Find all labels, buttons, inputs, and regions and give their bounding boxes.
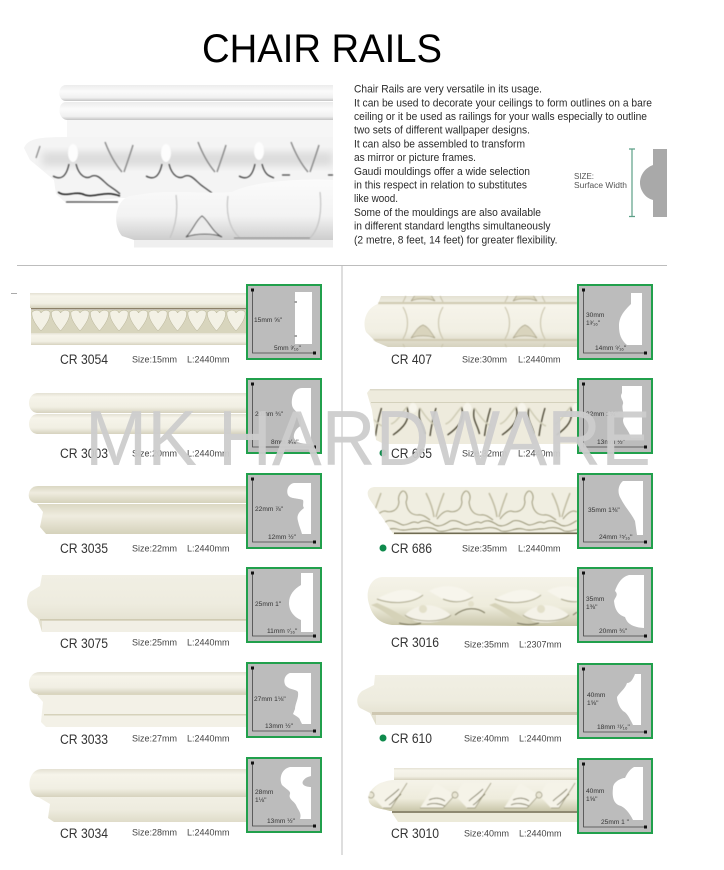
product: CR 407 xyxy=(364,296,577,367)
product: CR 3016: Size:35mm xyxy=(464,640,509,650)
neck strip xyxy=(67,119,333,143)
product: CR 407: Size:30mm xyxy=(462,354,507,364)
profile box: CR 665: 32mm 1¼" xyxy=(586,411,618,418)
intro paragraph: Gaudi mouldings offer a wide selection xyxy=(354,166,530,178)
profile box: CR 665: 13mm ½" xyxy=(597,438,626,446)
profile box: CR 3033 xyxy=(247,663,321,737)
profile box: CR 3034 xyxy=(247,758,321,832)
intro paragraph: (2 metre, 8 feet, 14 feet) for greater flexibility. xyxy=(354,234,558,246)
product: CR 3003 xyxy=(29,393,246,461)
product: CR 3010: Size:40mm xyxy=(464,828,509,838)
product: CR 3016: L:2307mm xyxy=(519,640,562,650)
product: CR 3033: CR 3033 xyxy=(60,732,108,747)
watermark: MK HARDWARE xyxy=(85,394,651,482)
profile box: CR 686: 24mm ¹⁵⁄₁₆" xyxy=(599,534,633,541)
intro paragraph: It can also be assembled to transform xyxy=(354,138,525,150)
intro paragraph: Chair Rails are very versatile in its usage. xyxy=(354,84,542,96)
product: CR 3075: Size:25mm xyxy=(132,638,177,648)
product: CR 3016 xyxy=(368,577,577,650)
profile box: CR 686 xyxy=(578,474,652,548)
lower block arcs and tent xyxy=(170,192,321,238)
profile box: CR 3016: 20mm ¾" xyxy=(599,628,628,635)
profile box: CR 3054: 15mm ⅝" xyxy=(254,317,283,324)
title: CHAIR RAILS xyxy=(202,27,442,71)
profile box: CR 3034: 13mm ½" xyxy=(267,817,296,825)
product: CR 686: Size:35mm xyxy=(462,544,507,554)
product: CR 610: L:2440mm xyxy=(519,734,562,744)
hero moulding image xyxy=(24,85,333,248)
intro paragraph: like wood. xyxy=(354,193,398,205)
profile box: CR 3034: 28mm xyxy=(255,789,274,796)
profile box: CR 3016: 1⅜" xyxy=(586,604,598,611)
size legend diagram: Surface Width xyxy=(574,181,627,190)
green dot marker xyxy=(380,734,386,742)
intro paragraph: two sets of different wallpaper designs. xyxy=(354,125,530,137)
profile box: CR 3010: 40mm xyxy=(586,788,605,795)
profile box: CR 3016 xyxy=(578,568,652,642)
profile box: CR 3033: 13mm ½" xyxy=(265,722,294,730)
product: CR 3010 xyxy=(368,768,577,841)
product: CR 407: CR 407 xyxy=(391,352,432,367)
intro paragraph: in different standard lengths simultaneously xyxy=(354,221,551,233)
profile box: CR 407: 14mm ⁹⁄₁₆" xyxy=(595,345,627,352)
lower bulged block xyxy=(116,180,333,240)
profile box: CR 3054 xyxy=(247,285,321,359)
product: CR 3035: L:2440mm xyxy=(187,544,230,554)
product: CR 665 xyxy=(367,389,577,461)
profile box: CR 3035: 12mm ½" xyxy=(268,533,297,541)
product: CR 3054 xyxy=(30,293,246,367)
product: CR 407: L:2440mm xyxy=(518,354,561,364)
product: CR 3034: CR 3034 xyxy=(60,826,108,841)
profile box: CR 3016: 35mm xyxy=(586,596,605,603)
product: CR 3034 xyxy=(29,769,246,841)
product: CR 3010: CR 3010 xyxy=(391,826,439,841)
profile box: CR 3010: 1⅝" xyxy=(586,796,598,803)
profile box: CR 665 xyxy=(578,379,652,453)
product: CR 686: L:2440mm xyxy=(518,544,561,554)
profile box: CR 3054: 5mm ³⁄₁₆" xyxy=(274,345,302,352)
product: CR 3054: Size:15mm xyxy=(132,354,177,364)
product: CR 3003: Size:20mm xyxy=(132,448,177,458)
product: CR 3034: Size:28mm xyxy=(132,828,177,838)
product: CR 3075: L:2440mm xyxy=(187,638,230,648)
product: CR 610: Size:40mm xyxy=(464,734,509,744)
intro paragraph: ceiling or it be used as railings for your walls especially to outline xyxy=(354,111,647,123)
section dividers xyxy=(17,266,667,855)
profile box: CR 3034: 1⅛" xyxy=(255,797,267,804)
product: CR 3075: CR 3075 xyxy=(60,636,108,651)
green dot marker xyxy=(380,450,386,456)
product: CR 610 xyxy=(357,675,577,746)
profile box: CR 610: 40mm xyxy=(587,692,606,699)
product: CR 665: CR 665 xyxy=(391,446,432,461)
leaf band shading xyxy=(42,152,333,166)
profile box: CR 610: 18mm ¹¹⁄₁₆" xyxy=(597,724,631,731)
green dot marker xyxy=(380,544,386,552)
product: CR 686: CR 686 xyxy=(391,541,432,556)
profile box: CR 407: 1³⁄₁₆" xyxy=(586,320,601,327)
profile box: CR 610: 1⅝" xyxy=(587,700,599,707)
product: CR 3035 xyxy=(29,486,246,556)
profile box: CR 3003: 20mm ¾" xyxy=(255,411,284,418)
intro paragraph xyxy=(354,84,652,246)
profile box: CR 3010: 25mm 1 " xyxy=(601,819,630,826)
product: CR 3033: Size:27mm xyxy=(132,734,177,744)
size legend diagram xyxy=(574,149,667,217)
product: CR 3075 xyxy=(27,575,246,651)
product: CR 3054: CR 3054 xyxy=(60,352,108,367)
product: CR 3034: L:2440mm xyxy=(187,828,230,838)
product: CR 3010: L:2440mm xyxy=(519,828,562,838)
profile box: CR 3010 xyxy=(578,759,652,833)
product: CR 686 xyxy=(368,487,577,556)
profile box: CR 3033: 27mm 1⅛" xyxy=(254,696,286,703)
product: CR 665: Size:32mm xyxy=(462,448,507,458)
product: CR 3033: L:2440mm xyxy=(187,734,230,744)
size legend diagram: SIZE: xyxy=(574,172,594,181)
intro paragraph: It can be used to decorate your ceilings to form outlines on a bare xyxy=(354,97,652,109)
product: CR 3003: L:2440mm xyxy=(187,448,230,458)
profile box: CR 407 xyxy=(578,285,652,359)
product: CR 3033 xyxy=(29,672,246,747)
product: CR 665: L:2440mm xyxy=(518,448,561,458)
product: CR 3003: CR 3003 xyxy=(60,446,108,461)
product: CR 3054: L:2440mm xyxy=(187,354,230,364)
product: CR 3016: CR 3016 xyxy=(391,635,439,650)
product: CR 3035: CR 3035 xyxy=(60,541,108,556)
leaf ornaments xyxy=(36,142,333,202)
profile box: CR 686: 35mm 1⅜" xyxy=(588,507,620,514)
product: CR 3035: Size:22mm xyxy=(132,544,177,554)
product: CR 610: CR 610 xyxy=(391,731,432,746)
profile box: CR 3035 xyxy=(247,474,321,548)
profile box: CR 610 xyxy=(578,664,652,738)
intro paragraph: in this respect in relation to substitutes xyxy=(354,180,527,192)
profile box: CR 3003: 8mm ⁵⁄₁₆" xyxy=(271,439,299,446)
leaf band xyxy=(24,137,333,203)
profile box: CR 3003 xyxy=(247,379,321,453)
intro paragraph: Some of the mouldings are also available xyxy=(354,207,541,219)
profile box: CR 3035: 22mm ⅞" xyxy=(255,506,284,513)
profile box: CR 3075: 25mm 1" xyxy=(255,601,282,608)
profile box: CR 3075: 11mm ⁷⁄₁₆" xyxy=(267,628,298,635)
profile box: CR 407: 30mm xyxy=(586,312,605,319)
intro paragraph: as mirror or picture frames. xyxy=(354,152,476,164)
profile box: CR 3075 xyxy=(247,568,321,642)
